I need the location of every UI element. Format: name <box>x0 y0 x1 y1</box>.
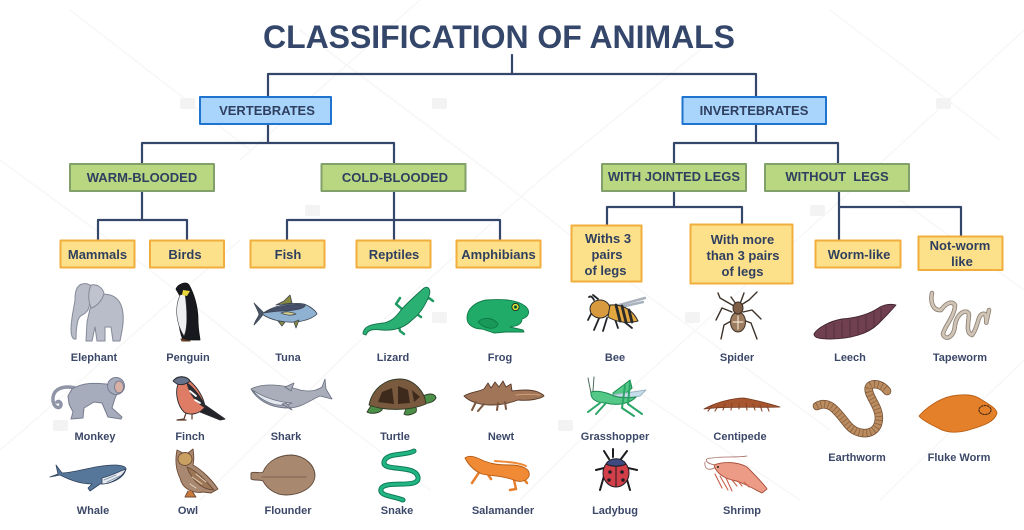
label: tuna: Tuna <box>275 352 302 364</box>
box: vertebrates: VERTEBRATES <box>219 103 315 118</box>
box: not-worm like <box>918 236 1002 270</box>
animal: lizard <box>363 287 433 335</box>
box: amphibians <box>456 240 540 268</box>
animal: elephant <box>71 284 123 341</box>
animal: spider <box>716 292 761 339</box>
box: withs 3 pairs of legs: Withs 3 <box>585 231 631 246</box>
label: bee: Bee <box>605 352 625 364</box>
box: mammals: Mammals <box>68 247 127 262</box>
box: fish: Fish <box>275 247 301 262</box>
label: grasshopper: Grasshopper <box>581 431 650 443</box>
label: shark: Shark <box>271 431 302 443</box>
animal: tapeworm <box>931 293 989 338</box>
animal: monkey <box>53 378 124 419</box>
label: leech: Leech <box>834 352 866 364</box>
label: owl: Owl <box>178 505 198 517</box>
box: reptiles: Reptiles <box>369 247 419 262</box>
animal: tuna <box>254 295 317 328</box>
label: whale: Whale <box>77 505 109 517</box>
box: birds <box>150 240 224 268</box>
label: flounder: Flounder <box>264 505 312 517</box>
label: lizard: Lizard <box>377 352 409 364</box>
animal: owl <box>176 449 218 497</box>
box: without legs: WITHOUT LEGS <box>785 169 889 184</box>
label: monkey: Monkey <box>75 431 116 443</box>
box: vertebrates <box>200 97 331 124</box>
box: worm-like <box>816 240 900 268</box>
box: with more than 3 pairs of legs: of legs <box>722 264 763 279</box>
animal: bee <box>588 295 645 331</box>
label: ladybug: Ladybug <box>592 505 638 517</box>
label: newt: Newt <box>488 431 514 443</box>
box: warm-blooded <box>70 164 214 191</box>
box: with more than 3 pairs of legs <box>690 224 792 284</box>
animal: shark <box>251 379 332 410</box>
box: amphibians: Amphibians <box>461 247 536 262</box>
box: withs 3 pairs of legs: pairs <box>591 247 623 262</box>
box: worm-like: Worm-like <box>828 247 890 262</box>
label: snake: Snake <box>381 505 413 517</box>
label: shrimp: Shrimp <box>723 505 761 517</box>
animal: centipede <box>704 398 780 411</box>
animal: snake <box>381 451 418 500</box>
title: CLASSIFICATION OF ANIMALS <box>263 19 735 55</box>
connector lines <box>98 55 961 240</box>
box: reptiles <box>356 240 430 268</box>
animal: frog <box>467 300 529 333</box>
box: not-worm like: like <box>951 254 973 269</box>
box: invertebrates <box>682 97 826 124</box>
label: penguin: Penguin <box>166 352 210 364</box>
animal: flounder <box>251 455 315 495</box>
label: frog: Frog <box>488 352 512 364</box>
label: centipede: Centipede <box>713 431 767 443</box>
animal: newt <box>464 381 544 411</box>
label: tapeworm: Tapeworm <box>933 352 987 364</box>
animal: shrimp <box>705 456 767 493</box>
box: cold-blooded <box>322 164 466 191</box>
box: invertebrates: INVERTEBRATES <box>700 103 809 118</box>
box: with more than 3 pairs of legs: than 3 pairs <box>707 248 779 263</box>
box: withs 3 pairs of legs <box>572 226 642 282</box>
label: turtle: Turtle <box>380 431 410 443</box>
label: earthworm: Earthworm <box>828 452 886 464</box>
box: cold-blooded: COLD-BLOODED <box>342 170 448 185</box>
animal: fluke worm <box>919 395 997 432</box>
animal: penguin <box>176 283 200 341</box>
box: withs 3 pairs of legs: of legs <box>585 263 626 278</box>
label: fluke worm: Fluke Worm <box>928 452 991 464</box>
label: finch: Finch <box>175 431 205 443</box>
box: without legs <box>765 164 909 191</box>
box: warm-blooded: WARM-BLOODED <box>87 170 197 185</box>
box: not-worm like: Not-worm <box>930 238 990 253</box>
label: elephant: Elephant <box>71 352 118 364</box>
animal: whale <box>50 465 126 491</box>
box: with jointed legs: WITH JOINTED LEGS <box>608 169 740 184</box>
box: fish <box>250 240 324 268</box>
label: spider: Spider <box>720 352 755 364</box>
box: mammals <box>60 240 134 268</box>
animal: finch <box>173 377 225 420</box>
box: birds: Birds <box>168 247 202 262</box>
box: with jointed legs <box>602 164 746 191</box>
animal: salamander <box>465 456 529 490</box>
animal: leech <box>814 304 896 339</box>
animal: ladybug <box>596 449 637 490</box>
animal: grasshopper <box>588 377 646 416</box>
label: salamander: Salamander <box>472 505 535 517</box>
animal: turtle <box>367 379 436 415</box>
box: with more than 3 pairs of legs: With more <box>711 232 774 247</box>
animal: earthworm <box>817 384 887 433</box>
